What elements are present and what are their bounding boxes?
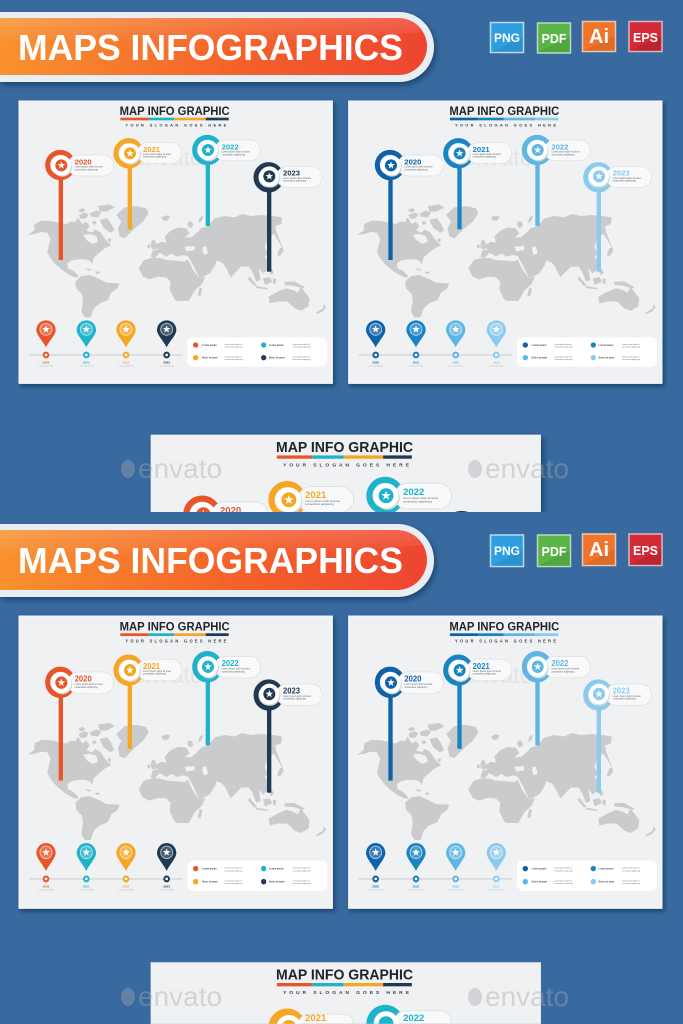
- timeline item 2020: [36, 843, 56, 892]
- pin 2022: 2022: [403, 1013, 424, 1024]
- title banner: second: [0, 524, 434, 597]
- title banner: top: MAPS INFOGRAPHICS: [18, 27, 403, 68]
- legend: Dolor sit amet: [532, 356, 547, 359]
- pin 2022: Lorem ipsum dolor sit amet: [551, 667, 580, 671]
- pin 2022: Lorem ipsum dolor sit amet: [222, 151, 250, 154]
- legend: consectetur adipiscing: [554, 869, 572, 872]
- legend: consectetur adipiscing: [292, 346, 310, 349]
- icon: EPS badge: EPS: [633, 544, 658, 558]
- heading: MAP INFO GRAPHIC: [449, 619, 559, 634]
- timeline item 2023: Lorem ipsum dolor: [489, 890, 504, 892]
- pin 2022: [524, 654, 590, 745]
- icon: PNG badge: [490, 535, 524, 566]
- title banner: top: [0, 12, 434, 82]
- heading: YOUR SLOGAN GOES HERE: [125, 123, 227, 128]
- pin 2022: Lorem ipsum dolor sit amet: [403, 496, 438, 500]
- legend: Lorem ipsum dolor sit: [622, 879, 640, 882]
- heading: MAP INFO GRAPHIC: [120, 619, 230, 634]
- legend: [517, 861, 657, 891]
- legend: Lorem ipsum dolor sit: [292, 343, 310, 346]
- timeline item 2020: 2020: [372, 360, 379, 364]
- heading: [276, 439, 413, 469]
- pin 2020: 2020: [404, 674, 422, 684]
- legend: Dolor sit amet: [202, 356, 218, 359]
- timeline item 2021: Lorem ipsum dolor: [79, 890, 94, 892]
- pin 2021: [271, 484, 354, 516]
- heading: [449, 104, 560, 128]
- pin 2023: [256, 682, 322, 793]
- heading: YOUR SLOGAN GOES HERE: [455, 639, 556, 644]
- timeline item 2023: [487, 320, 506, 367]
- watermark left: envato: [138, 981, 222, 1012]
- heading: YOUR SLOGAN GOES HERE: [283, 463, 410, 469]
- timeline item 2022: 2022: [452, 884, 459, 889]
- pin 2020: consectetur adipiscing: [404, 168, 428, 171]
- legend: consectetur adipiscing: [622, 346, 640, 349]
- pin 2023: [586, 682, 652, 793]
- timeline item 2021: 2021: [413, 360, 420, 364]
- legend: consectetur adipiscing: [554, 346, 572, 349]
- icon: Ai badge: Ai: [589, 26, 609, 48]
- timeline item 2020: Lorem ipsum dolor: [38, 890, 54, 892]
- icon: Ai badge: [582, 22, 616, 52]
- timeline item 2023: Lorem ipsum dolor: [489, 365, 504, 367]
- timeline item 2022: [116, 320, 136, 367]
- timeline item 2023: Lorem ipsum dolor: [159, 365, 175, 367]
- pin 2020: [186, 499, 269, 530]
- legend: Lorem ipsum dolor sit: [225, 867, 243, 870]
- legend: [187, 337, 327, 367]
- legend: Lorem ipsum dolor sit: [225, 355, 243, 358]
- title banner: second: MAPS INFOGRAPHICS: [18, 540, 403, 581]
- timeline item 2021: Lorem ipsum dolor: [408, 365, 424, 367]
- timeline item 2023: [157, 320, 176, 367]
- pin 2021: consectetur adipiscing: [305, 502, 334, 506]
- timeline: [359, 843, 512, 892]
- pin 2022: consectetur adipiscing: [222, 153, 245, 156]
- icon: PNG badge: PNG: [494, 31, 520, 45]
- pin 2021: [116, 141, 182, 229]
- pin 2020: [377, 152, 443, 260]
- pin 2022: [195, 137, 261, 226]
- pin 2020: consectetur adipiscing: [404, 686, 428, 689]
- timeline item 2022: Lorem ipsum dolor: [448, 365, 464, 367]
- icon: PDF badge: [538, 23, 570, 53]
- watermark right: envato: [485, 981, 569, 1012]
- pin 2022: Lorem ipsum dolor sit amet: [222, 667, 250, 671]
- pin 2022: consectetur adipiscing: [403, 499, 432, 503]
- legend: Lorem ipsum dolor sit: [554, 343, 572, 346]
- pin 2021: 2021: [143, 662, 161, 671]
- pin 2021: Lorem ipsum dolor sit amet: [143, 153, 171, 156]
- panel: orange map, lower left: [19, 616, 332, 908]
- pin 2023: [446, 514, 477, 546]
- pin 2021: Lorem ipsum dolor sit amet: [143, 670, 171, 673]
- timeline item 2021: 2021: [83, 360, 90, 364]
- pin 2022: [524, 137, 590, 226]
- world map: [357, 723, 656, 840]
- timeline item 2022: Lorem ipsum dolor: [118, 890, 134, 892]
- pin 2023: consectetur adipiscing: [613, 697, 636, 701]
- pin 2023: Lorem ipsum dolor sit amet: [283, 177, 311, 180]
- legend: consectetur adipiscing: [622, 358, 640, 361]
- timeline item 2020: [366, 320, 385, 367]
- pin 2023: consectetur adipiscing: [283, 697, 307, 701]
- legend: consectetur adipiscing: [225, 882, 243, 885]
- legend: Lorem ipsum: [599, 868, 613, 871]
- timeline item 2021: 2021: [413, 884, 420, 889]
- timeline item 2020: 2020: [43, 360, 50, 364]
- legend: Lorem ipsum dolor sit: [622, 343, 640, 346]
- heading: [120, 104, 230, 128]
- pin 2022: consectetur adipiscing: [551, 670, 575, 673]
- legend: Lorem ipsum dolor sit: [554, 355, 572, 358]
- timeline item 2022: 2022: [123, 360, 130, 364]
- icon: PDF badge: PDF: [542, 32, 567, 46]
- watermark: envato: [133, 145, 203, 171]
- watermark: envato: [463, 663, 533, 689]
- pin 2020: consectetur adipiscing: [75, 686, 98, 689]
- pin 2022: consectetur adipiscing: [222, 670, 245, 673]
- legend: Lorem ipsum: [269, 868, 284, 871]
- pin 2020: 2020: [75, 674, 92, 684]
- legend: Lorem ipsum dolor sit: [554, 879, 572, 882]
- legend: Lorem ipsum dolor sit: [292, 355, 310, 358]
- pin 2022: 2022: [551, 659, 569, 668]
- pin 2021: consectetur adipiscing: [143, 156, 167, 159]
- pin 2020: [48, 152, 114, 260]
- pin 2023: Lorem ipsum dolor sit amet: [283, 695, 311, 698]
- pin 2020: Lorem ipsum dolor sit amet: [75, 683, 103, 686]
- legend: Lorem ipsum dolor sit: [554, 867, 572, 870]
- legend: Lorem ipsum dolor sit: [292, 879, 310, 882]
- pin 2021: Lorem ipsum dolor sit amet: [473, 153, 501, 156]
- pin 2023: consectetur adipiscing: [283, 180, 307, 183]
- panel: blue map, top right: [349, 101, 662, 383]
- timeline item 2021: [406, 320, 426, 367]
- timeline item 2023: [157, 843, 176, 892]
- timeline item 2020: [36, 320, 56, 367]
- legend: [517, 337, 657, 367]
- panel: cropped enlarged preview, first: [151, 435, 541, 546]
- pin 2023: [256, 165, 322, 272]
- pin 2023: 2023: [283, 686, 301, 695]
- panel: blue map, lower right: [349, 616, 662, 908]
- pin 2020: Lorem ipsum dolor sit amet: [75, 166, 103, 169]
- timeline item 2023: 2023: [163, 360, 170, 364]
- pin 2022: [369, 480, 452, 511]
- timeline item 2022: [116, 843, 136, 892]
- icon: PNG badge: [490, 22, 524, 52]
- legend: Dolor sit amet: [269, 880, 285, 883]
- legend: consectetur adipiscing: [292, 358, 310, 361]
- panel: cropped enlarged preview, second: [151, 962, 541, 1024]
- pin 2023: Lorem ipsum dolor sit amet: [613, 695, 641, 698]
- pin 2020: 2020: [220, 506, 241, 517]
- timeline item 2020: Lorem ipsum dolor: [368, 890, 384, 892]
- legend: consectetur adipiscing: [554, 358, 572, 361]
- pin 2021: 2021: [473, 662, 490, 671]
- pin 2022: 2022: [222, 142, 239, 151]
- pin 2023: 2023: [283, 169, 300, 178]
- legend: Lorem ipsum: [532, 868, 546, 871]
- legend: Lorem ipsum dolor sit: [622, 867, 640, 870]
- timeline item 2020: 2020: [43, 884, 50, 889]
- pin 2022: [366, 1005, 452, 1024]
- timeline item 2021: 2021: [83, 884, 90, 889]
- pin 2023: [586, 165, 652, 272]
- legend: consectetur adipiscing: [225, 346, 243, 349]
- timeline: [29, 320, 182, 367]
- pin 2021: [446, 657, 512, 749]
- legend: Lorem ipsum dolor sit: [225, 879, 243, 882]
- heading: MAP INFO GRAPHIC: [449, 104, 560, 118]
- timeline item 2023: 2023: [493, 360, 500, 364]
- legend: Lorem ipsum dolor sit: [622, 355, 640, 358]
- world map: [27, 723, 326, 840]
- legend: consectetur adipiscing: [225, 358, 243, 361]
- timeline item 2020: Lorem ipsum dolor: [368, 365, 384, 367]
- timeline item 2023: 2023: [163, 884, 170, 889]
- legend: consectetur adipiscing: [554, 882, 572, 885]
- pin 2021: consectetur adipiscing: [473, 673, 496, 676]
- icon: Ai badge: Ai: [589, 539, 609, 561]
- pin 2023: Lorem ipsum dolor sit amet: [613, 177, 641, 180]
- icon: EPS badge: EPS: [633, 31, 658, 45]
- icon: PNG badge: PNG: [494, 544, 520, 558]
- legend: Lorem ipsum: [202, 345, 217, 347]
- pin 2023: consectetur adipiscing: [613, 180, 636, 183]
- timeline: [29, 843, 182, 892]
- icon: EPS badge: [629, 22, 662, 52]
- timeline item 2021: Lorem ipsum dolor: [79, 365, 94, 367]
- world map: [27, 204, 326, 317]
- heading: MAP INFO GRAPHIC: [120, 104, 230, 118]
- pin 2020: consectetur adipiscing: [75, 168, 98, 171]
- pin 2020: 2020: [75, 157, 92, 166]
- legend: consectetur adipiscing: [622, 869, 640, 872]
- heading: YOUR SLOGAN GOES HERE: [455, 123, 556, 128]
- heading: MAP INFO GRAPHIC: [276, 439, 413, 456]
- pin 2021: 2021: [305, 1013, 327, 1024]
- legend: Lorem ipsum dolor sit: [225, 343, 243, 346]
- watermark: envato: [463, 145, 533, 171]
- pin 2022: [195, 654, 261, 745]
- timeline item 2022: 2022: [123, 884, 130, 889]
- legend: consectetur adipiscing: [622, 882, 640, 885]
- panel: orange map, top left: [19, 101, 332, 383]
- pin 2021: 2021: [305, 490, 327, 501]
- pin 2020: Lorem ipsum dolor sit amet: [404, 683, 433, 686]
- timeline item 2020: 2020: [372, 884, 379, 889]
- pin 2020: Lorem ipsum dolor sit amet: [404, 166, 433, 169]
- legend: Lorem ipsum: [202, 868, 217, 871]
- legend: [187, 861, 327, 891]
- heading: [120, 619, 230, 644]
- legend: consectetur adipiscing: [225, 869, 243, 872]
- legend: Dolor sit amet: [532, 880, 547, 883]
- timeline item 2023: 2023: [493, 884, 500, 889]
- pin 2022: 2022: [222, 659, 239, 668]
- timeline item 2022: 2022: [452, 360, 459, 364]
- heading: YOUR SLOGAN GOES HERE: [283, 990, 410, 996]
- pin 2020: 2020: [404, 157, 421, 166]
- pin 2021: [116, 657, 182, 749]
- pin 2021: Lorem ipsum dolor sit amet: [305, 499, 340, 503]
- pin 2021: Lorem ipsum dolor sit amet: [473, 670, 501, 673]
- pin 2022: consectetur adipiscing: [551, 153, 575, 156]
- timeline item 2021: [77, 843, 96, 892]
- pin 2020: [48, 669, 114, 781]
- legend: Dolor sit amet: [269, 356, 285, 359]
- pin 2021: [269, 1009, 354, 1024]
- legend: Dolor sit amet: [202, 880, 218, 883]
- legend: Dolor sit amet: [599, 880, 614, 883]
- legend: Lorem ipsum: [532, 345, 546, 347]
- heading: [449, 619, 559, 644]
- legend: Lorem ipsum dolor sit: [292, 867, 310, 870]
- timeline item 2022: Lorem ipsum dolor: [118, 365, 134, 367]
- pin 2020: [377, 669, 443, 781]
- icon: Ai badge: [582, 534, 616, 566]
- pin 2023: 2023: [613, 169, 630, 178]
- timeline item 2023: Lorem ipsum dolor: [159, 890, 175, 892]
- timeline item 2021: [77, 320, 96, 367]
- watermark right: envato: [485, 453, 569, 484]
- legend: consectetur adipiscing: [292, 882, 310, 885]
- icon: EPS badge: [629, 534, 662, 566]
- timeline item 2021: Lorem ipsum dolor: [408, 890, 424, 892]
- timeline item 2020: Lorem ipsum dolor: [38, 365, 54, 367]
- legend: Lorem ipsum: [599, 345, 613, 347]
- pin 2023: 2023: [613, 686, 630, 695]
- heading: [276, 967, 413, 996]
- second copy background: [0, 512, 683, 1024]
- legend: consectetur adipiscing: [292, 869, 310, 872]
- pin 2021: [446, 141, 512, 229]
- world map: [357, 204, 656, 317]
- timeline item 2022: [446, 843, 465, 892]
- timeline item 2021: [406, 843, 426, 892]
- timeline item 2023: [487, 843, 506, 892]
- timeline item 2022: [446, 320, 465, 367]
- timeline item 2020: [366, 843, 385, 892]
- watermark: envato: [133, 663, 203, 689]
- pin 2022: 2022: [551, 142, 568, 151]
- pin 2021: consectetur adipiscing: [143, 673, 167, 676]
- icon: PDF badge: PDF: [542, 545, 567, 559]
- heading: MAP INFO GRAPHIC: [276, 967, 413, 984]
- pin 2021: consectetur adipiscing: [473, 156, 496, 159]
- watermark left: envato: [138, 453, 222, 484]
- legend: Lorem ipsum: [269, 345, 284, 347]
- pin 2021: 2021: [143, 145, 161, 154]
- legend: Dolor sit amet: [599, 356, 614, 359]
- icon: PDF badge: [538, 535, 570, 566]
- timeline item 2022: Lorem ipsum dolor: [448, 890, 464, 892]
- pin 2022: Lorem ipsum dolor sit amet: [551, 151, 580, 154]
- heading: YOUR SLOGAN GOES HERE: [125, 639, 227, 644]
- pin 2021: 2021: [473, 145, 490, 154]
- timeline: [359, 320, 512, 367]
- pin 2022: 2022: [403, 487, 424, 498]
